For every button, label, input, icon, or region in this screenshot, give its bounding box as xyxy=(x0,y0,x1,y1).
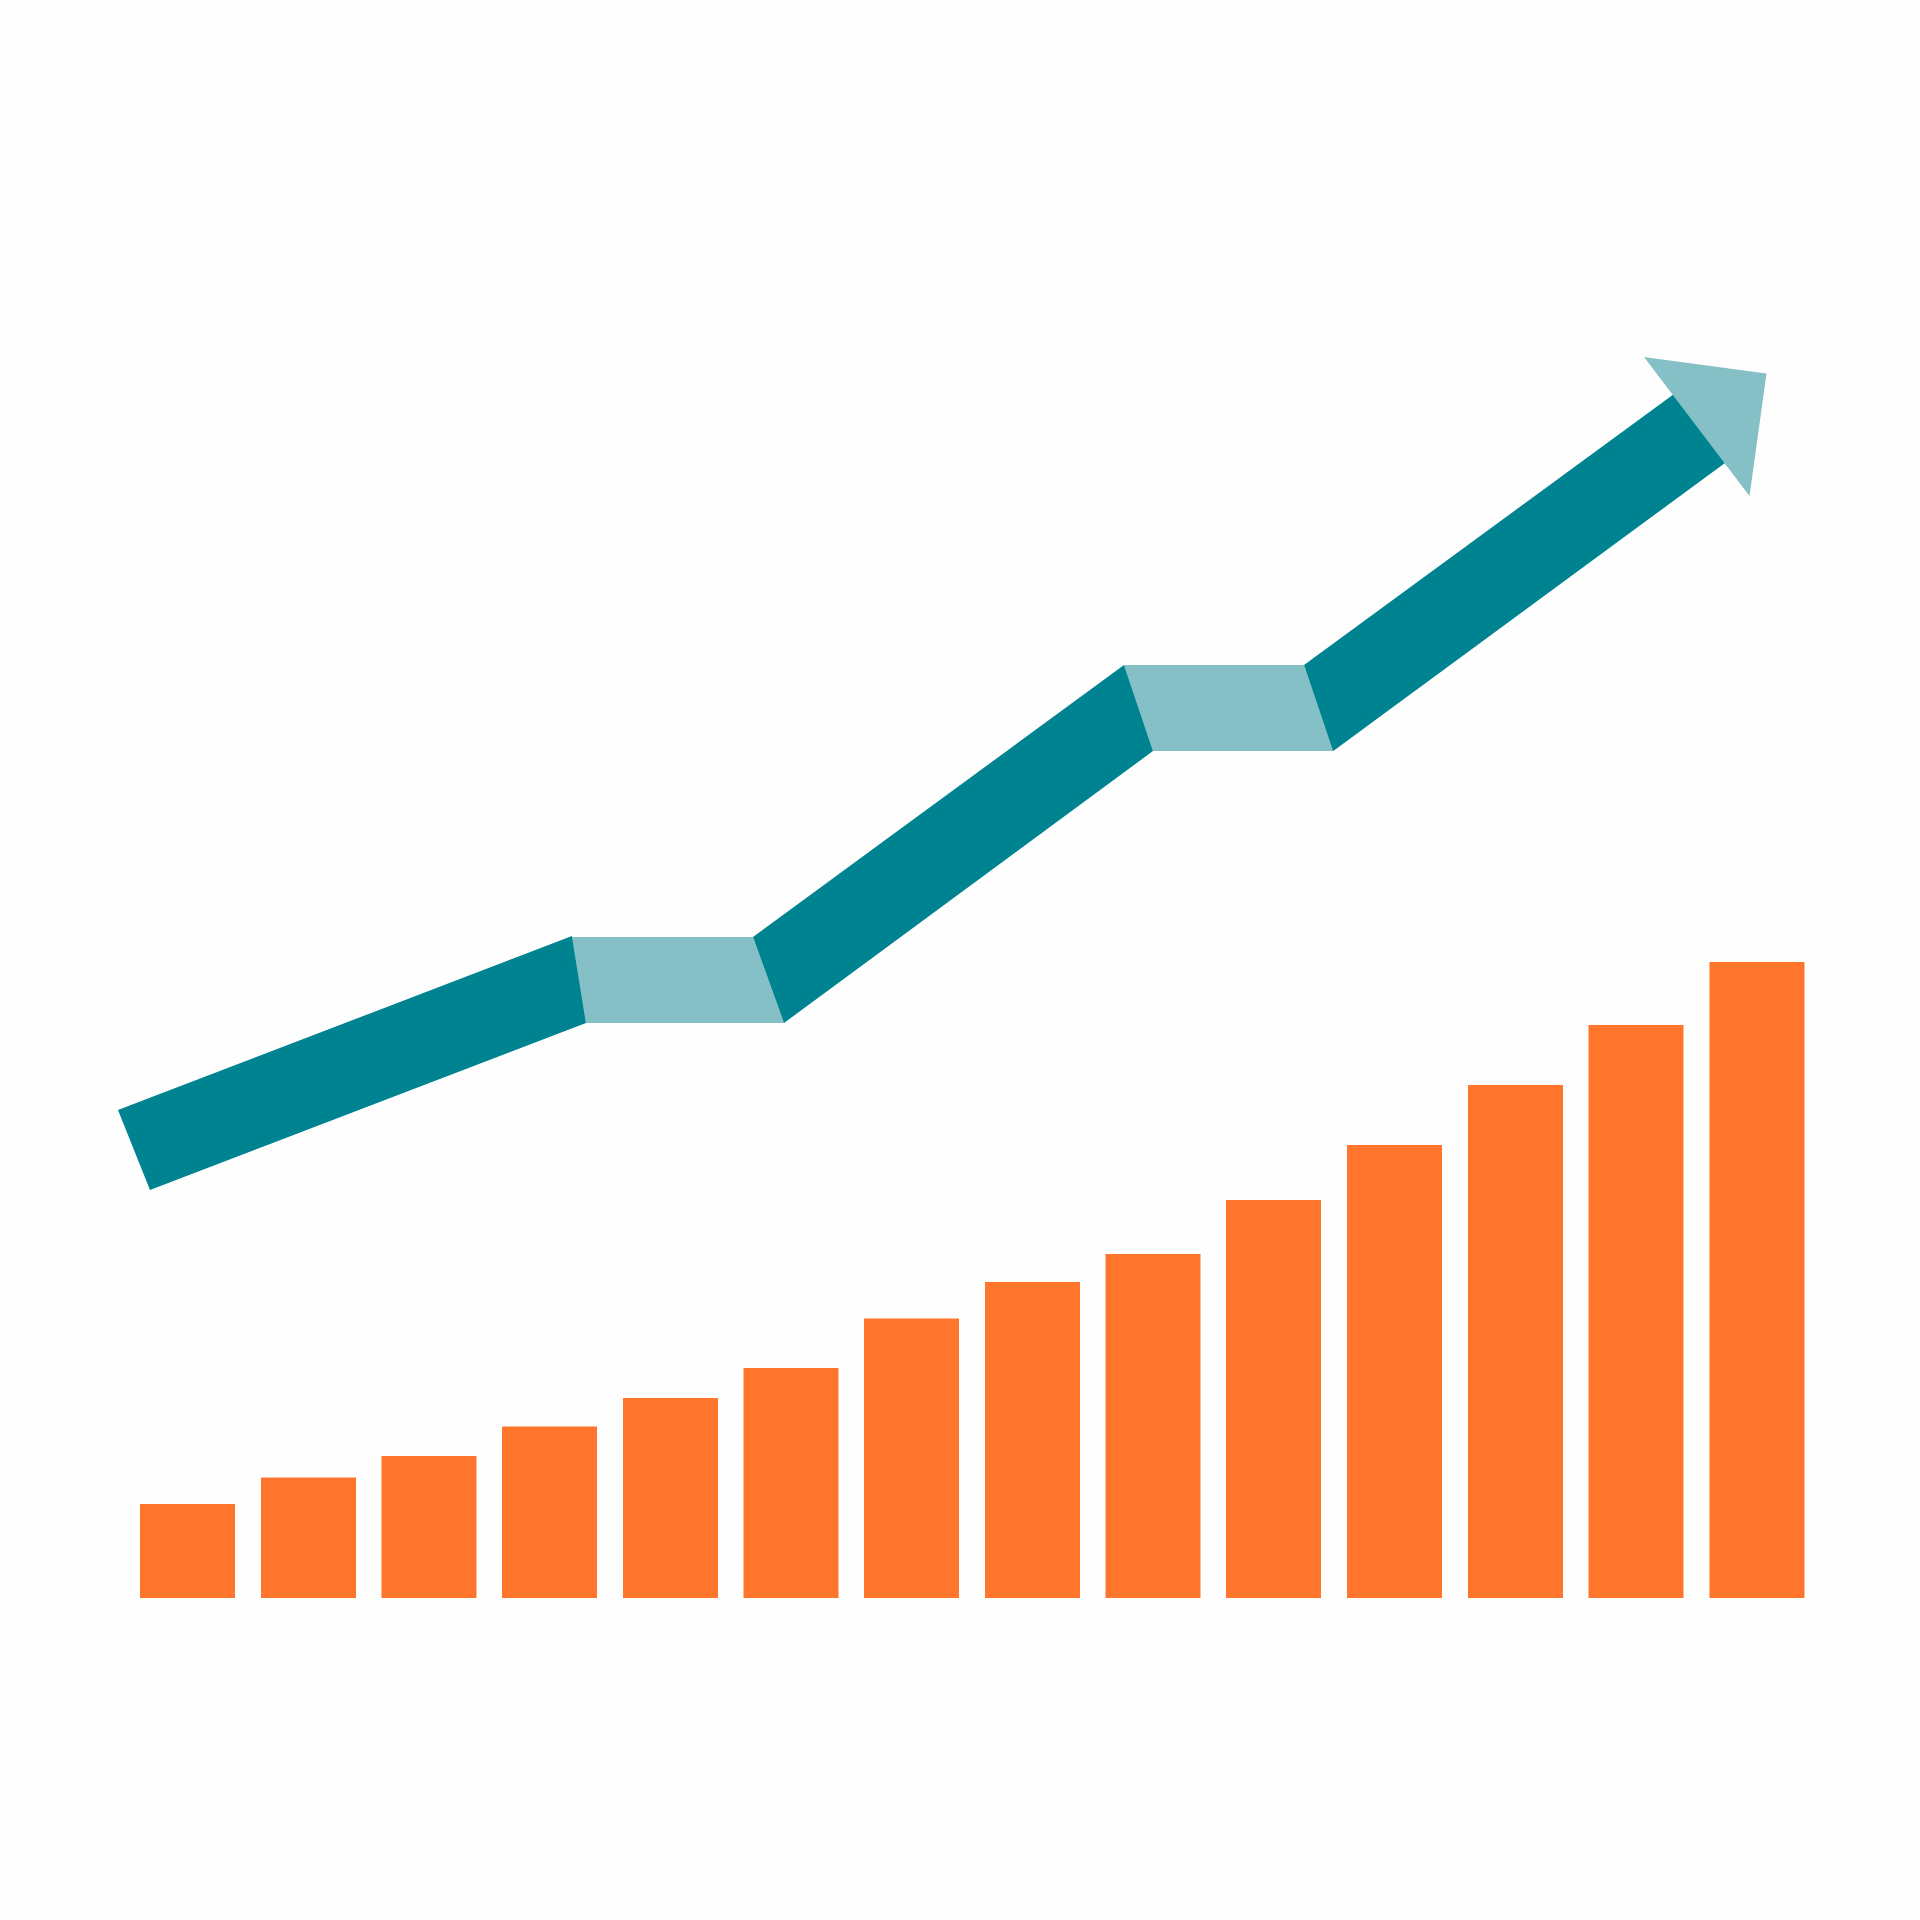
trend arrow xyxy=(118,357,1766,1190)
bar 10 xyxy=(1226,1200,1321,1598)
bar chart xyxy=(140,962,1804,1598)
bar 2 xyxy=(261,1478,356,1598)
bar 6 xyxy=(744,1368,838,1598)
bar 5 xyxy=(623,1398,718,1598)
bar 13 xyxy=(1588,1025,1684,1598)
arrow segment 1 xyxy=(118,936,586,1190)
bar 7 xyxy=(864,1318,959,1598)
arrowhead xyxy=(1644,357,1766,496)
bar 11 xyxy=(1347,1145,1442,1598)
bar 14 xyxy=(1710,962,1804,1598)
bar 4 xyxy=(502,1426,597,1598)
arrow segment 2 xyxy=(753,665,1153,1023)
bar 12 xyxy=(1468,1085,1563,1598)
bar 1 xyxy=(140,1504,235,1598)
flat section 2 xyxy=(1124,665,1333,751)
bar 8 xyxy=(985,1282,1080,1598)
arrow segment 3 xyxy=(1304,394,1725,751)
bar 9 xyxy=(1106,1254,1200,1598)
bar 3 xyxy=(382,1456,476,1598)
flat section 1 xyxy=(572,937,784,1023)
